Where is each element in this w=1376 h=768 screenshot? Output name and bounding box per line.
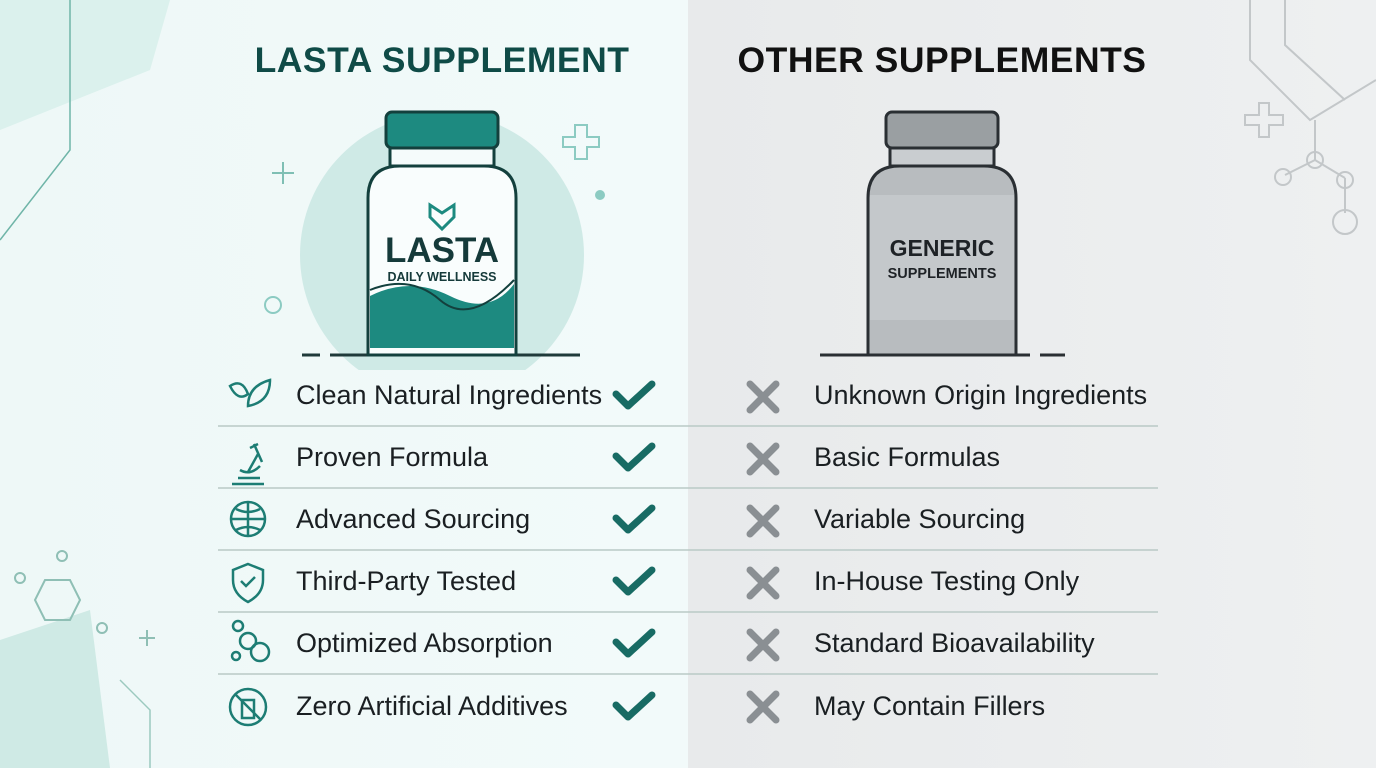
comparison table: May Contain Fillers: [814, 691, 1045, 721]
comparison table: Proven Formula: [296, 442, 488, 472]
lasta bottle illustration: DAILY WELLNESS: [387, 270, 497, 284]
lasta bottle illustration: LASTA: [385, 231, 499, 270]
generic bottle illustration: SUPPLEMENTS: [888, 266, 997, 282]
left row labels: Clean Natural Ingredients: [296, 380, 602, 410]
title: lasta: LASTA SUPPLEMENT: [255, 40, 629, 80]
comparison table: In-House Testing Only: [814, 566, 1079, 596]
lasta bottle illustration: [264, 110, 605, 370]
title: other: OTHER SUPPLEMENTS: [738, 40, 1146, 80]
generic bottle illustration: GENERIC: [890, 235, 994, 261]
comparison table: Advanced Sourcing: [296, 504, 530, 534]
comparison table: Third-Party Tested: [296, 566, 516, 596]
comparison table: Zero Artificial Additives: [296, 691, 568, 721]
comparison table: Basic Formulas: [814, 442, 1000, 472]
comparison table: Optimized Absorption: [296, 628, 553, 658]
comparison table: Standard Bioavailability: [814, 628, 1095, 658]
comparison table: [218, 378, 1158, 726]
right row labels: Unknown Origin Ingredients: [814, 380, 1147, 410]
generic bottle illustration: [820, 110, 1065, 356]
comparison table: Variable Sourcing: [814, 504, 1025, 534]
